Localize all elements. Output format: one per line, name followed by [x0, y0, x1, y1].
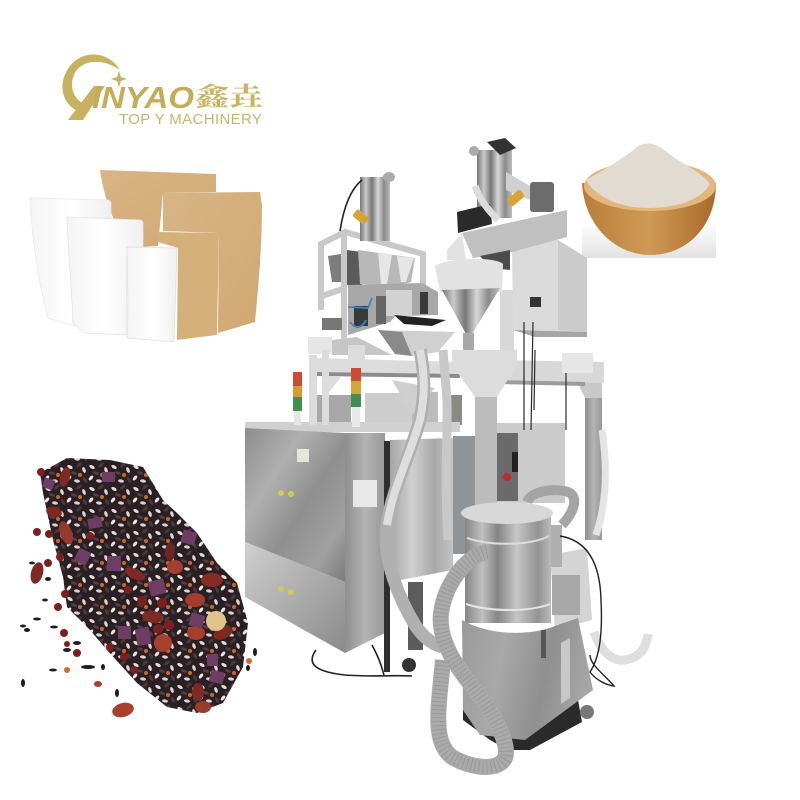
warning label on front [297, 449, 309, 462]
auger outlet [463, 333, 474, 353]
hanging cables [524, 322, 566, 430]
mixed grains pile [20, 458, 257, 720]
table and frame [308, 337, 604, 425]
caster wheel [402, 658, 416, 672]
frame base deck [245, 422, 460, 432]
upper gray shelf [332, 337, 392, 355]
left yellow sensor [352, 209, 369, 225]
logo star [111, 71, 127, 87]
inclined feeder box [462, 210, 567, 258]
upper body cover [447, 233, 466, 260]
main cabinet upper front [245, 428, 345, 582]
vacuum lid [461, 502, 553, 524]
auger cone [442, 288, 500, 334]
feeder dark slot [480, 250, 510, 270]
right vacuum hopper [477, 150, 512, 218]
vacuum vent grille [561, 638, 570, 704]
cabinet darker side [558, 240, 587, 332]
bowl shadow backdrop [582, 222, 716, 258]
white pouch middle [67, 217, 143, 335]
upper bracket [506, 172, 530, 200]
left hopper black cable [340, 180, 362, 231]
bracket hose [475, 186, 498, 220]
purple sweet potato cubes [42, 472, 225, 685]
left tower guts [322, 250, 455, 356]
right leg gusset [573, 373, 602, 398]
stack light left [293, 372, 302, 425]
door locks [278, 490, 294, 595]
right upper assembly [435, 138, 593, 430]
stack light right [351, 368, 361, 427]
left pneumatic unit [322, 318, 342, 330]
right beam [497, 360, 604, 383]
bowl rim [584, 161, 716, 211]
logo tail [68, 86, 105, 120]
left tower frame [321, 232, 423, 340]
second transfer hose [443, 350, 448, 540]
vacuum cleaner [438, 490, 614, 767]
main cabinet side [345, 433, 385, 653]
table legs [309, 345, 365, 425]
blue pneumatic tubes [348, 298, 372, 327]
funnel support bracket [452, 350, 517, 397]
inner small canister [552, 575, 580, 615]
hose corrugation [438, 552, 506, 767]
right white curve hose [596, 430, 605, 535]
drum band [466, 604, 550, 610]
packaging machine [245, 138, 648, 767]
chickpea [206, 611, 226, 631]
elbow down pipe [550, 525, 562, 567]
central component panel [453, 436, 477, 554]
left hopper cap [383, 172, 395, 182]
logo Chinese name: 鑫垚 [195, 77, 263, 114]
lower left equipment boxes [315, 392, 462, 425]
right hopper black lid box [487, 138, 516, 155]
logo ring emblem [62, 54, 120, 113]
vacuum top elbow hose [527, 490, 574, 525]
scattered grains [20, 562, 257, 697]
dark mechanism [347, 250, 362, 285]
main beam [315, 358, 460, 374]
left box deck [308, 337, 332, 354]
floor cable loop [312, 645, 412, 676]
junction box [562, 353, 593, 373]
right cabinet panel [390, 438, 453, 582]
vacuum drum [465, 515, 551, 623]
weigher darker modules [354, 306, 368, 326]
white pouch small [127, 247, 177, 342]
logo wordmark: INYAO [92, 80, 194, 115]
kraft pouch back [100, 170, 216, 248]
auger tank [435, 259, 503, 292]
cabinet underside [513, 330, 587, 337]
vacuum black cable [560, 536, 614, 686]
drum lid ring [467, 536, 549, 544]
white transfer hose [386, 350, 442, 647]
right yellow sensor [506, 189, 525, 207]
vacuum base [462, 618, 593, 740]
lower right cabinet [497, 423, 565, 503]
weigher body [348, 283, 438, 335]
logo: Jinyao Top Y Machinery [62, 54, 263, 128]
emergency stop button [503, 473, 511, 481]
electrical cabinet [512, 240, 587, 332]
left vacuum hopper [340, 172, 395, 241]
vacuum grey corrugated hose [438, 552, 506, 767]
control strip [497, 433, 518, 501]
black weigh chute plate [394, 315, 446, 326]
support leg [408, 582, 423, 650]
dark upright strip [384, 441, 390, 672]
wooden bowl [582, 183, 716, 255]
grey hoppers [358, 250, 415, 286]
lower collecting funnels [378, 330, 455, 356]
main cabinet lower front [245, 542, 345, 653]
right hopper cap [469, 146, 479, 156]
vacuum rear tank [550, 548, 592, 630]
right leg [585, 362, 602, 540]
white pouch left [30, 198, 111, 326]
sensor box [530, 297, 541, 307]
hose highlight [387, 350, 424, 525]
vacuum wheel [580, 705, 594, 719]
dark feed hopper [328, 254, 341, 282]
kraft pouch small [157, 232, 219, 340]
vacuum black skirt [463, 690, 582, 750]
large beans [28, 466, 235, 720]
black handle [512, 452, 518, 472]
right side white hose [594, 632, 648, 660]
logo tagline: TOP Y MACHINERY [119, 111, 262, 128]
small red beans [33, 468, 174, 674]
kraft pouch large [163, 192, 262, 333]
tall back column [500, 290, 514, 365]
centre support column [475, 395, 497, 530]
black control box [457, 204, 492, 233]
vacuum clamp [541, 630, 546, 658]
flour mound [586, 144, 710, 208]
beam gusset [392, 380, 435, 415]
grain mass [40, 458, 248, 713]
pouches group [30, 170, 262, 342]
white label on side [353, 480, 377, 507]
flour bowl photo [582, 144, 716, 258]
grey motor [530, 182, 554, 212]
